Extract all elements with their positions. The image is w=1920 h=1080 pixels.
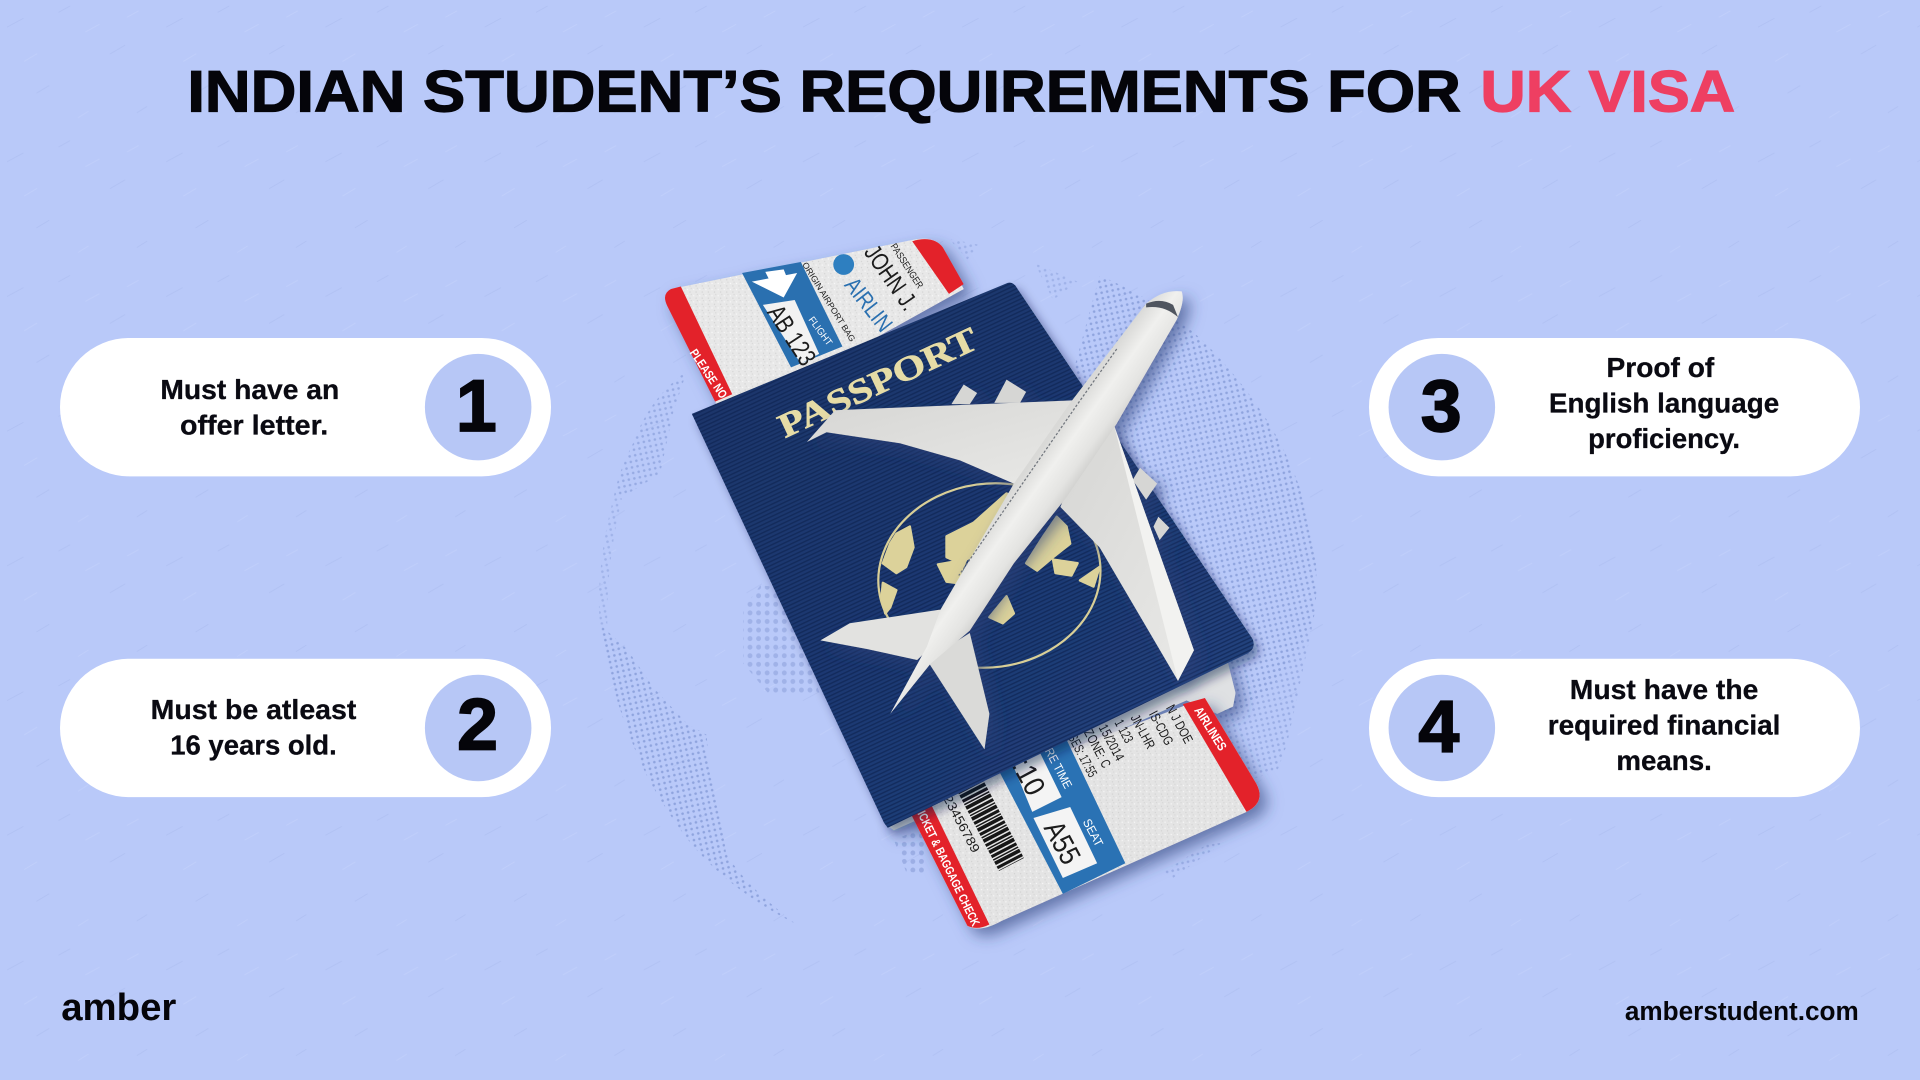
boarding pass: top: AIRLIN — [840, 272, 898, 337]
passport globe emblem — [866, 469, 1113, 682]
pill 3: English proficiency: English language — [1549, 388, 1779, 419]
pill 3: English proficiency: Proof of — [1607, 352, 1715, 383]
pill 1: offer letter: Must have an — [160, 374, 339, 405]
boarding pass: top: JOHN J. — [858, 240, 923, 316]
pill 4: financial means: 4 — [1418, 685, 1459, 768]
boarding pass: bottom: JN-LHR — [1128, 712, 1158, 752]
pill 2: age: Must be atleast — [151, 694, 357, 725]
pill 1: offer letter: offer letter. — [180, 410, 328, 441]
pill 4: financial means: means. — [1616, 745, 1712, 776]
boarding pass: bottom: AIRLINES — [1191, 704, 1230, 754]
boarding pass: top: ORIGIN AIRPORT BAG — [800, 260, 858, 344]
airplane — [807, 291, 1194, 749]
passport title: PASSPORT — [772, 320, 984, 446]
pill 4: financial means — [1369, 659, 1860, 797]
pill 2: age — [60, 659, 551, 797]
pill 3: English proficiency: proficiency. — [1588, 423, 1740, 454]
pill 4: financial means: Must have the — [1570, 674, 1758, 705]
pill 3: English proficiency: 3 — [1421, 364, 1462, 447]
dotted globe — [599, 239, 1317, 924]
boarding pass: top: PLEASE NO — [687, 347, 730, 401]
ticket pages under passport — [884, 659, 1236, 830]
boarding pass: bottom: 15/2014 — [1096, 722, 1128, 764]
boarding pass: top: AB 123 — [761, 300, 821, 371]
boarding pass: bottom: 123456789 — [937, 785, 983, 855]
boarding pass: bottom: SES: 17:55 — [1065, 732, 1100, 780]
pill 2: age: 16 years old. — [170, 729, 337, 760]
boarding pass: bottom: 1 123 — [1112, 717, 1136, 745]
title: UK VISA — [1480, 59, 1735, 124]
wings — [807, 400, 1102, 484]
engines — [951, 380, 1169, 540]
fuselage — [890, 291, 1183, 714]
pill 1: offer letter: 1 — [456, 364, 497, 447]
boarding pass: top — [665, 239, 964, 416]
boarding pass: bottom: SEAT — [1080, 816, 1106, 849]
pill 4: financial means: required financial — [1548, 710, 1780, 741]
boarding pass: bottom: TICKET & BAGGAGE CHECK — [912, 803, 983, 928]
boarding pass: bottom: N J DOE — [1163, 702, 1196, 746]
boarding pass: bottom: A55 — [1037, 816, 1087, 870]
title: INDIAN STUDENT’S REQUIREMENTS FOR — [187, 59, 1461, 124]
amber logo: amber — [61, 987, 177, 1029]
boarding pass: top: PASSENGER — [888, 242, 925, 291]
passport — [692, 283, 1254, 828]
boarding pass: bottom — [909, 698, 1260, 928]
boarding pass: bottom: RE TIME — [1042, 745, 1075, 791]
pill 1: offer letter — [60, 338, 551, 476]
pill 3: English proficiency — [1369, 338, 1860, 476]
boarding pass: bottom: :10 — [1005, 753, 1052, 801]
pill 2: age: 2 — [457, 682, 498, 765]
boarding pass: top: FLIGHT — [806, 315, 834, 348]
boarding pass: bottom: ZONE: C — [1081, 727, 1114, 771]
website: amberstudent.com — [1625, 996, 1859, 1026]
tail — [820, 610, 967, 660]
boarding pass: bottom: IS-CDG — [1146, 708, 1176, 748]
